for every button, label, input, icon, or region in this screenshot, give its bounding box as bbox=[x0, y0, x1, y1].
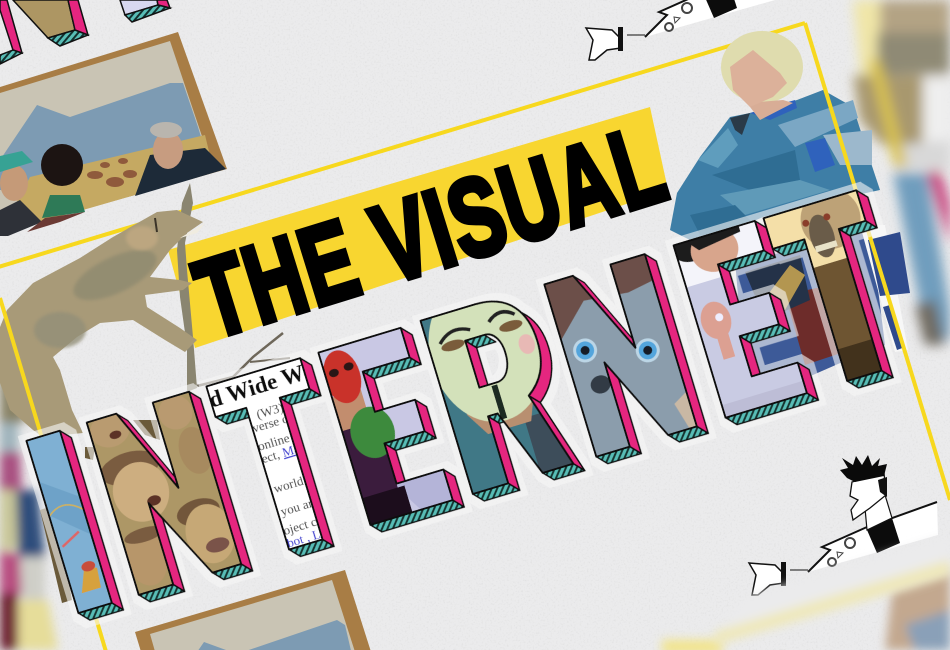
letter fragments from repeated poster, top left bbox=[0, 0, 170, 64]
collage behind E and T: sash and carpet bbox=[690, 205, 910, 385]
yellow frame line top bbox=[0, 23, 805, 268]
animal collage pieces behind I and N bbox=[40, 420, 160, 603]
blur veil across lower right bbox=[715, 535, 950, 645]
letter N with surprised cat bbox=[540, 249, 708, 467]
person with green collar bbox=[27, 144, 85, 232]
letter E with spider mask and green hand bbox=[312, 322, 464, 536]
person with teal cap bbox=[0, 151, 42, 236]
letter T with web page text: oject co bbox=[281, 512, 325, 538]
letter T with web page text: verse of bbox=[250, 409, 295, 436]
knight cosplay figure bbox=[670, 31, 880, 245]
letter N with laughing faces bbox=[82, 386, 253, 606]
blurred left-side poster repeat bbox=[0, 355, 58, 650]
blurred right-side poster repeat bbox=[853, 0, 950, 345]
title band bbox=[168, 107, 668, 348]
letter T with web page text: bot , Lib bbox=[285, 523, 332, 550]
tree branch and twigs bbox=[177, 183, 290, 392]
title text: THE VISUAL: THE VISUAL bbox=[183, 101, 680, 362]
older man bbox=[135, 122, 226, 196]
yellow frame line left bbox=[0, 298, 107, 650]
letter T with creature bbox=[759, 182, 900, 396]
blond head bbox=[721, 31, 803, 103]
letter T with web page text bbox=[198, 350, 342, 564]
armor bbox=[670, 90, 880, 245]
surfer torso and head bbox=[840, 455, 892, 530]
yellow frame line right bbox=[805, 23, 950, 500]
sloth illustration bbox=[0, 210, 205, 437]
letter T with web page text: (W3) is bbox=[254, 396, 296, 422]
letter R with anonymous mask bbox=[411, 265, 586, 504]
letter T with web page text: d Wide We bbox=[206, 358, 316, 413]
letter I with blue map bbox=[25, 425, 123, 623]
painting bottom bbox=[135, 570, 372, 650]
letter T with web page text: you are bbox=[279, 493, 320, 519]
letter E with man making ok sign bbox=[667, 212, 818, 429]
cartoon surfer bottom right bbox=[749, 455, 938, 595]
letter T with web page text: world's bbox=[272, 471, 312, 496]
illustrated word INTERNET bbox=[18, 164, 920, 623]
letter T with web page text: ect, Ma bbox=[260, 441, 301, 466]
painting top left bbox=[0, 32, 227, 236]
blurred bottom-right poster repeat bbox=[662, 572, 950, 650]
letter T with web page text: online al bbox=[256, 426, 304, 454]
cartoon surfer top bbox=[586, 0, 775, 60]
